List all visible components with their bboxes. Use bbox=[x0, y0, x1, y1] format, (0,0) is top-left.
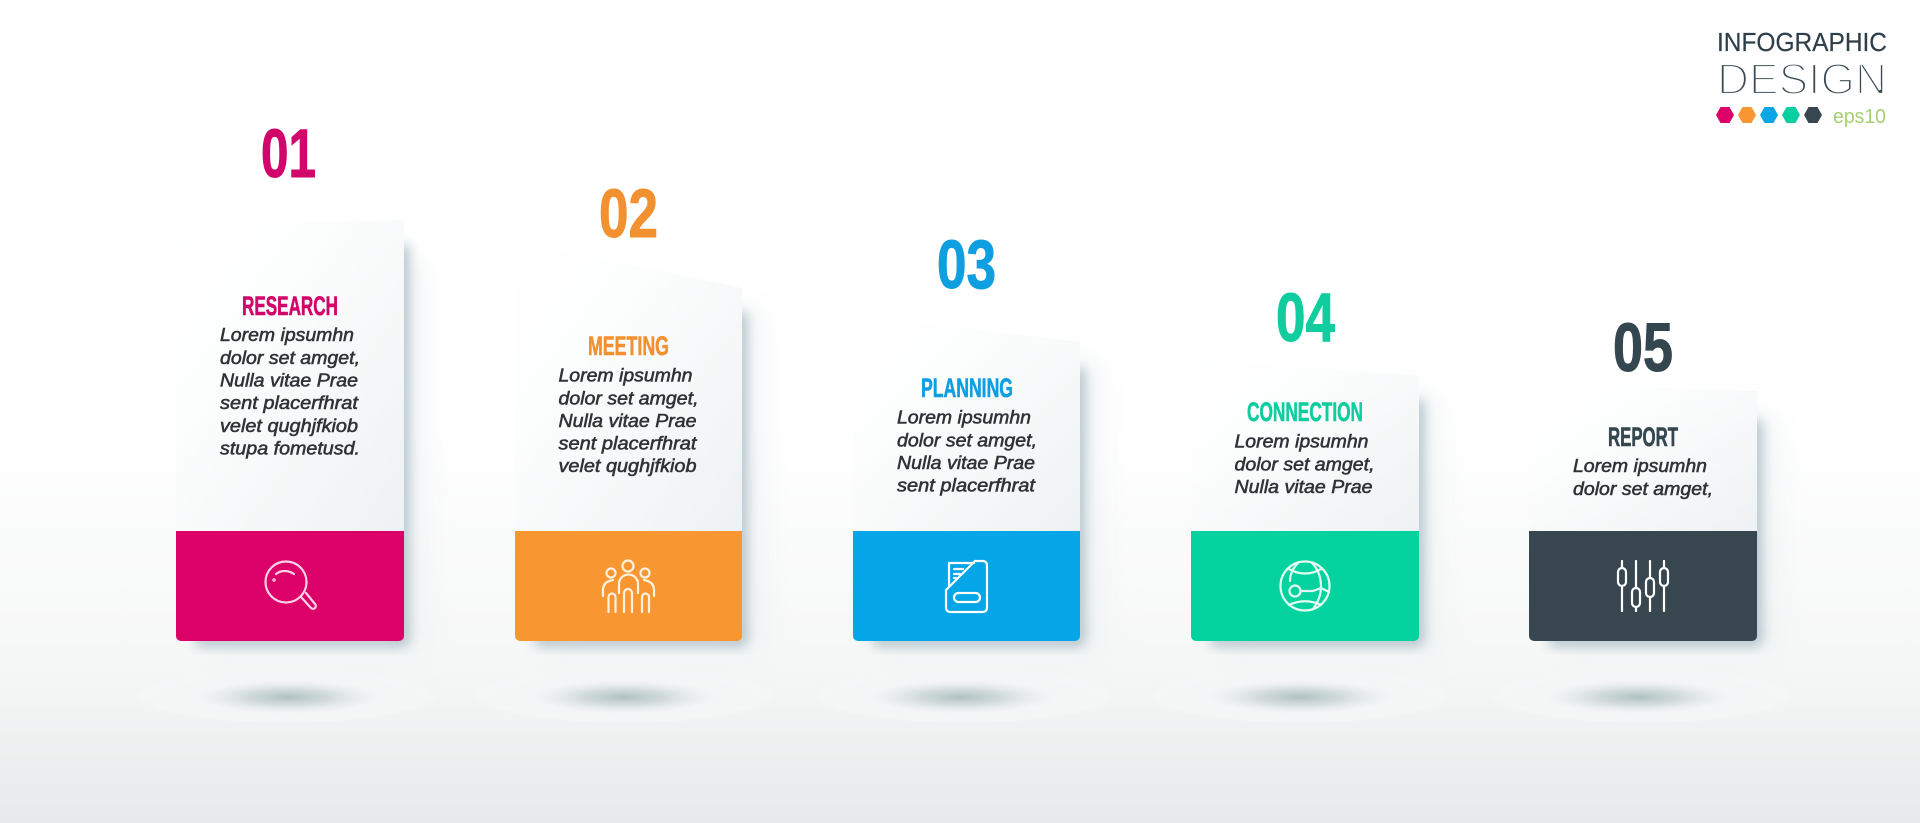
number: 04 bbox=[1276, 279, 1335, 356]
body text: dolor set amget, bbox=[220, 347, 360, 368]
floor shadow bbox=[1148, 669, 1452, 723]
body text bbox=[558, 364, 698, 476]
panel: meeting bbox=[472, 175, 776, 723]
colour block bbox=[515, 531, 742, 641]
panel: planning bbox=[812, 226, 1116, 723]
card shadow bbox=[196, 245, 425, 655]
icon: document folder bbox=[946, 561, 987, 612]
card body bbox=[1529, 384, 1757, 535]
body text: Lorem ipsumhn bbox=[897, 406, 1031, 428]
body text bbox=[897, 406, 1037, 496]
body text: Nulla vitae Prae bbox=[1234, 476, 1372, 497]
icon: team of people bbox=[603, 560, 654, 612]
body text: Lorem ipsumhn bbox=[558, 364, 692, 386]
logo line: DESIGN: DESIGN bbox=[1717, 55, 1887, 104]
floor shadow bbox=[472, 669, 776, 723]
body text: Nulla vitae Prae bbox=[220, 370, 358, 390]
body text: Lorem ipsumhn bbox=[1234, 430, 1368, 452]
body text: dolor set amget, bbox=[558, 388, 698, 408]
floor shadow bbox=[1490, 669, 1794, 723]
heading: CONNECTION bbox=[1247, 397, 1363, 427]
panel: report bbox=[1490, 309, 1794, 723]
body text bbox=[1234, 430, 1374, 497]
body text: Lorem ipsumhn bbox=[1573, 455, 1707, 476]
body text: Nulla vitae Prae bbox=[897, 452, 1035, 473]
floor shadow bbox=[812, 669, 1116, 723]
number: 02 bbox=[599, 175, 658, 252]
number: 01 bbox=[261, 115, 316, 192]
number: 03 bbox=[937, 226, 996, 303]
body text bbox=[1573, 455, 1713, 499]
icon: sliders bbox=[1618, 561, 1668, 611]
panel: connection bbox=[1148, 279, 1452, 723]
heading: PLANNING bbox=[921, 373, 1013, 403]
logo hexagons bbox=[1716, 107, 1822, 123]
body text: dolor set amget, bbox=[1234, 454, 1374, 474]
card shadow bbox=[1211, 395, 1439, 655]
logo label: eps10: eps10 bbox=[1833, 106, 1886, 128]
icon: magnifying glass bbox=[266, 562, 316, 609]
body text: Nulla vitae Prae bbox=[558, 410, 696, 431]
colour block bbox=[176, 531, 404, 641]
number: 05 bbox=[1613, 309, 1673, 386]
logo line: INFOGRAPHIC: INFOGRAPHIC bbox=[1717, 27, 1887, 57]
body text: sent placerfhrat bbox=[897, 474, 1036, 496]
colour block bbox=[853, 531, 1080, 641]
heading: MEETING bbox=[588, 331, 669, 361]
body text: dolor set amget, bbox=[897, 430, 1037, 450]
floor shadow bbox=[134, 669, 438, 723]
card body bbox=[853, 314, 1080, 535]
body text: velet qughjfkiob bbox=[220, 415, 358, 436]
card body bbox=[176, 220, 404, 535]
card shadow bbox=[535, 310, 763, 655]
logo: infographic design eps10 bbox=[1716, 27, 1887, 128]
body text: stupa fometusd. bbox=[220, 438, 360, 458]
card shadow bbox=[873, 360, 1101, 655]
card body bbox=[515, 240, 742, 535]
card body bbox=[1191, 357, 1419, 535]
body text: sent placerfhrat bbox=[558, 432, 697, 454]
body text: Lorem ipsumhn bbox=[220, 324, 354, 345]
card shadow bbox=[1549, 415, 1777, 655]
body text: dolor set amget, bbox=[1573, 478, 1713, 499]
body text bbox=[220, 324, 360, 458]
heading: RESEARCH bbox=[242, 291, 338, 321]
colour block bbox=[1191, 531, 1419, 641]
panel: research bbox=[134, 115, 438, 723]
colour block bbox=[1529, 531, 1757, 641]
body text: velet qughjfkiob bbox=[558, 455, 696, 476]
body text: sent placerfhrat bbox=[220, 392, 359, 413]
icon: globe bbox=[1280, 562, 1330, 610]
heading: REPORT bbox=[1608, 422, 1678, 452]
